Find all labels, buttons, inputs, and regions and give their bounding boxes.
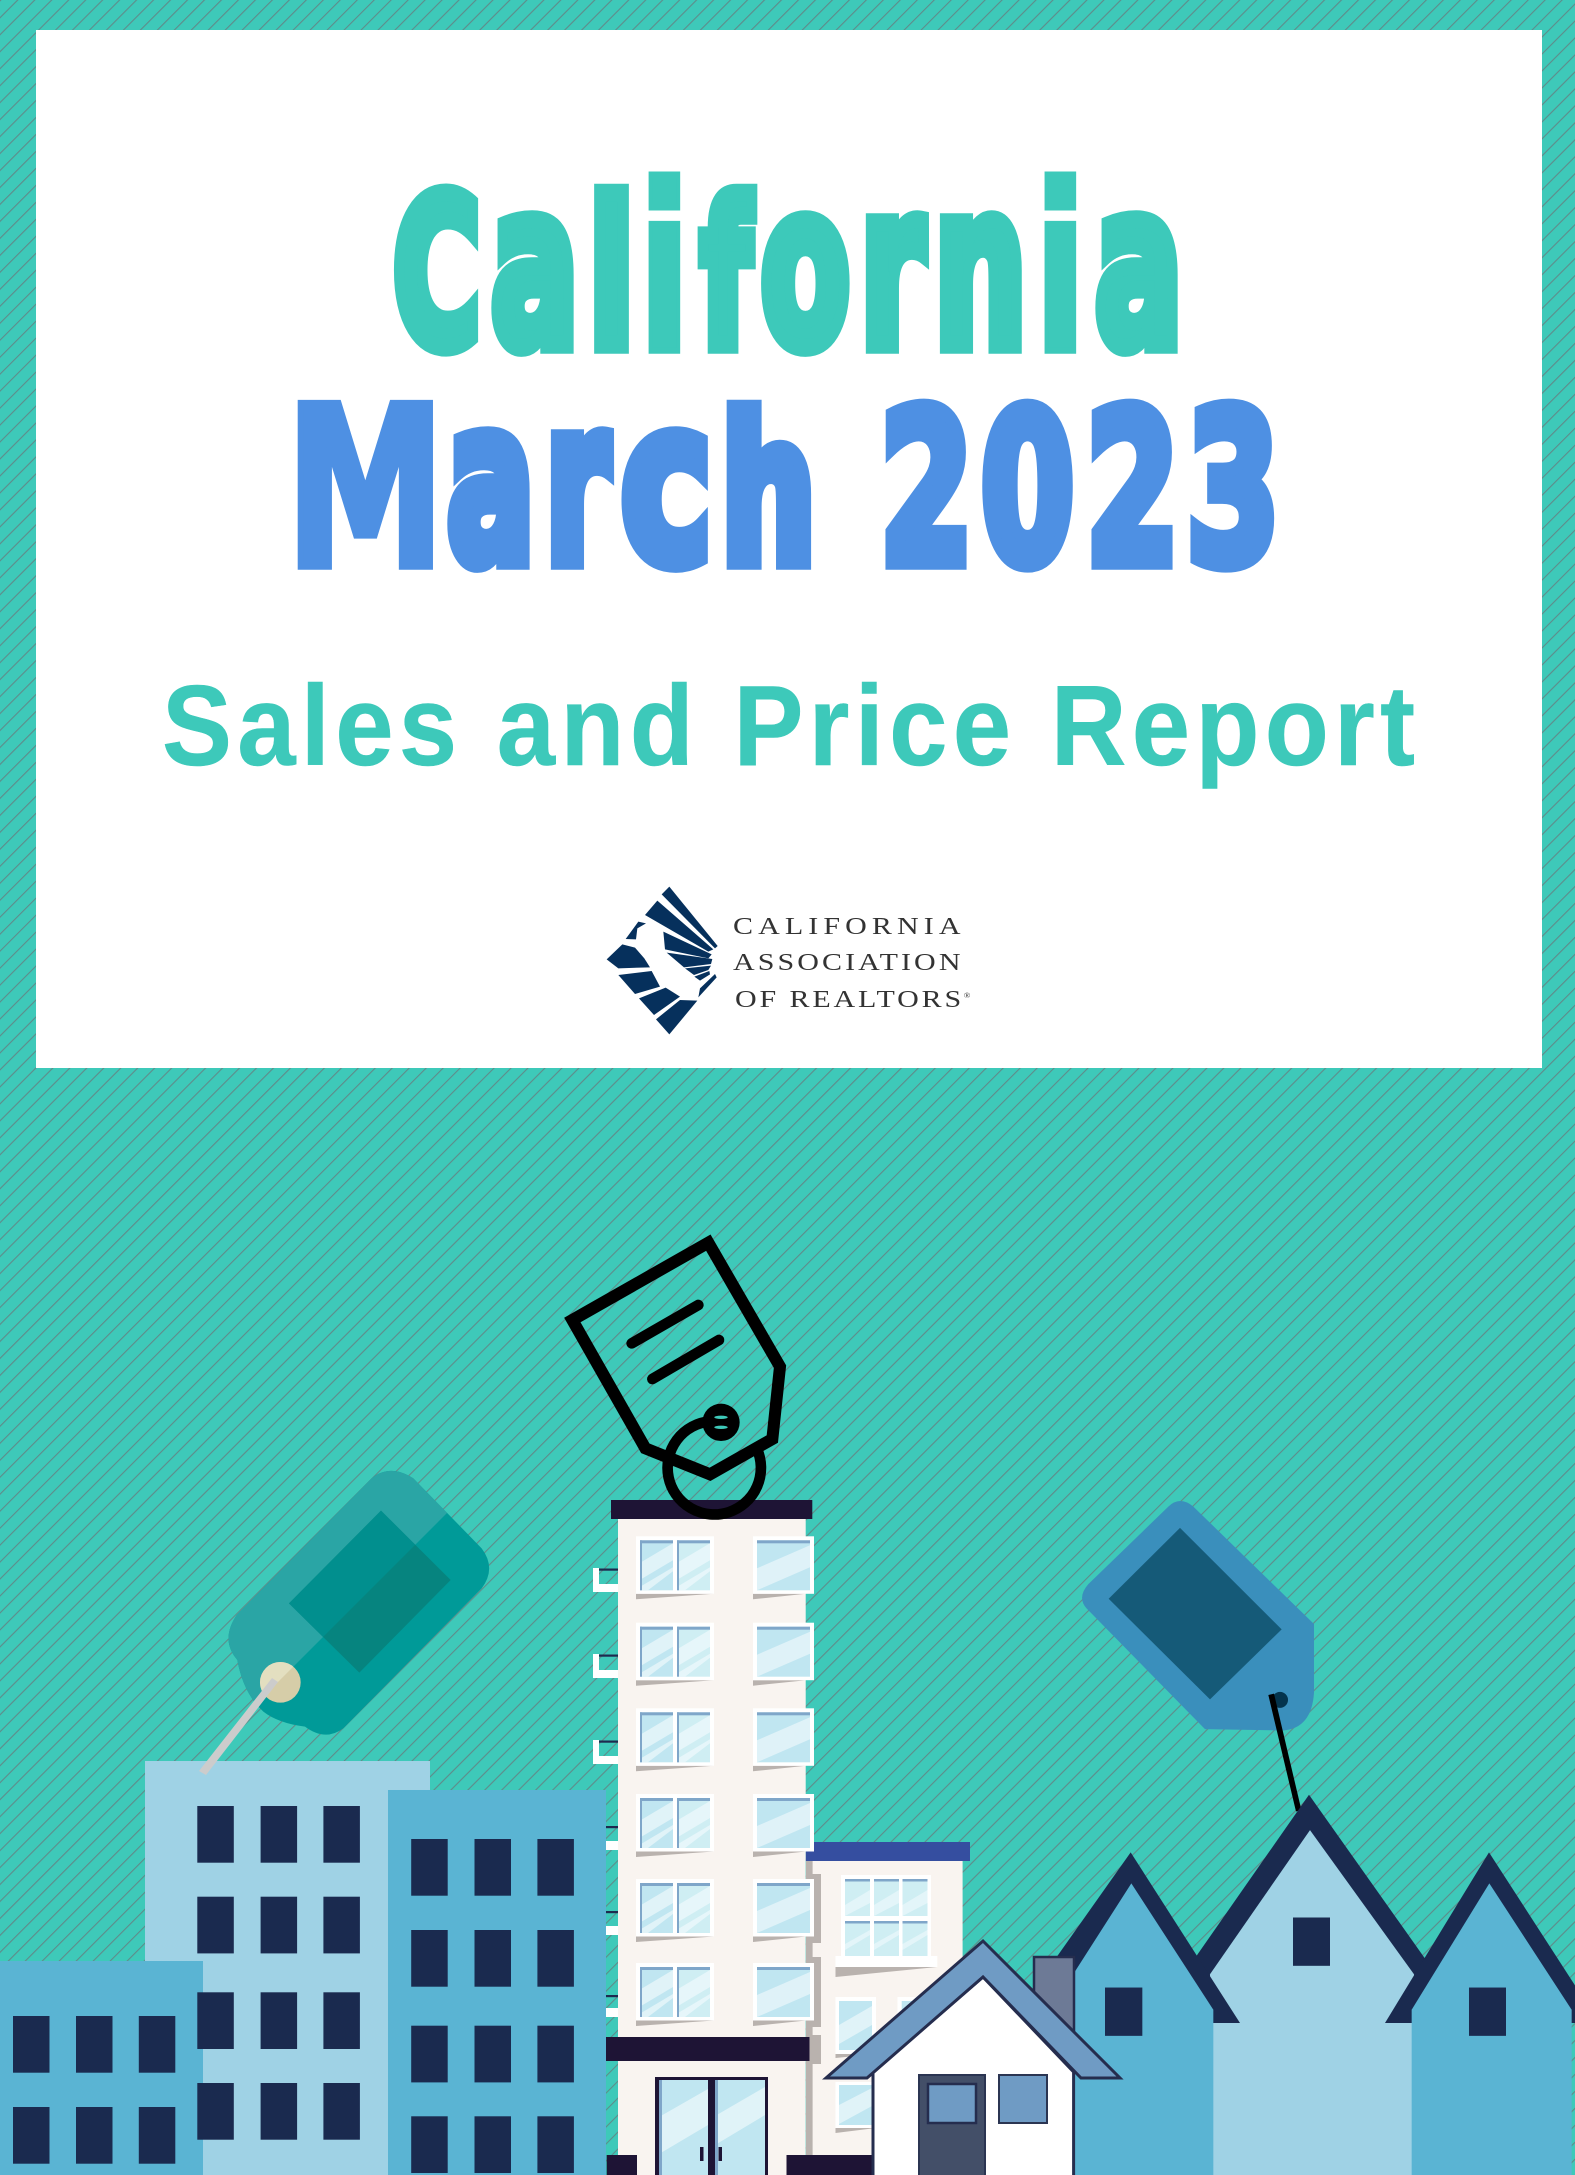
logo: California Association of Realtors (607, 887, 970, 1034)
tower entrance doors (655, 2077, 768, 2175)
title: March 2023: 2 (880, 369, 973, 612)
tower windows (636, 1536, 814, 2026)
house roof (826, 1941, 1120, 2078)
house body (873, 1977, 1074, 2175)
icon: blue price tag, right (1082, 1501, 1314, 1812)
house: small white house in front (826, 1941, 1120, 2175)
title: California: l (589, 159, 634, 392)
tower balconies (593, 1568, 618, 2017)
center house (1167, 1795, 1453, 2175)
building: lower left (0, 1961, 203, 2175)
title: California: i (637, 135, 691, 406)
icon: outlined price tag on tower (572, 1243, 780, 1514)
left house (1010, 1852, 1240, 2175)
title: March 2023: 3 (1187, 369, 1280, 612)
light blue tower windows (197, 1806, 360, 2140)
title: March 2023: r (545, 354, 609, 615)
building: low cream annex (806, 1842, 970, 2175)
title: March 2023: h (722, 375, 815, 608)
icon: tag string, grey (199, 1678, 278, 1775)
title: California: n (934, 138, 1027, 399)
title: March 2023: 0 (981, 369, 1074, 612)
title: California (393, 135, 1183, 406)
title: California: r (860, 138, 924, 399)
title: California: a (491, 138, 579, 399)
logo wordmark: OF REALTORS (735, 986, 961, 1012)
title: California: f (701, 159, 752, 392)
logo wordmark: ® (964, 992, 970, 1000)
building: light blue tower (145, 1761, 430, 2175)
title: California: a (1095, 138, 1183, 399)
logo wordmark: CALIFORNIA (733, 913, 961, 939)
title: March 2023: 2 (1086, 369, 1179, 612)
title: March 2023 (286, 354, 1280, 618)
title: March 2023: c (621, 354, 712, 615)
annex large window (836, 1875, 937, 1977)
white header panel (36, 30, 1542, 1068)
title: March 2023: M (286, 360, 445, 618)
logo wordmark (733, 913, 970, 1012)
houses: blue row with dark roofs (1010, 1795, 1575, 2175)
title: California: o (761, 138, 850, 399)
logo icon: diamond with state outline (607, 887, 718, 1034)
building: central cream tower (606, 1500, 872, 2175)
title: California: C (393, 154, 481, 394)
right house (1385, 1852, 1575, 2175)
house door (919, 2075, 985, 2175)
building: mid blue tower (388, 1790, 606, 2175)
title: California: i (1033, 135, 1087, 406)
logo wordmark: ASSOCIATION (733, 949, 961, 975)
annex lower windows (836, 1997, 938, 2133)
icon: teal price tag, left (228, 1471, 489, 1735)
subtitle: Sales and Price Report (162, 663, 1415, 790)
title: March 2023: a (447, 354, 535, 615)
chimney (1034, 1957, 1074, 2047)
house window (999, 2075, 1047, 2123)
